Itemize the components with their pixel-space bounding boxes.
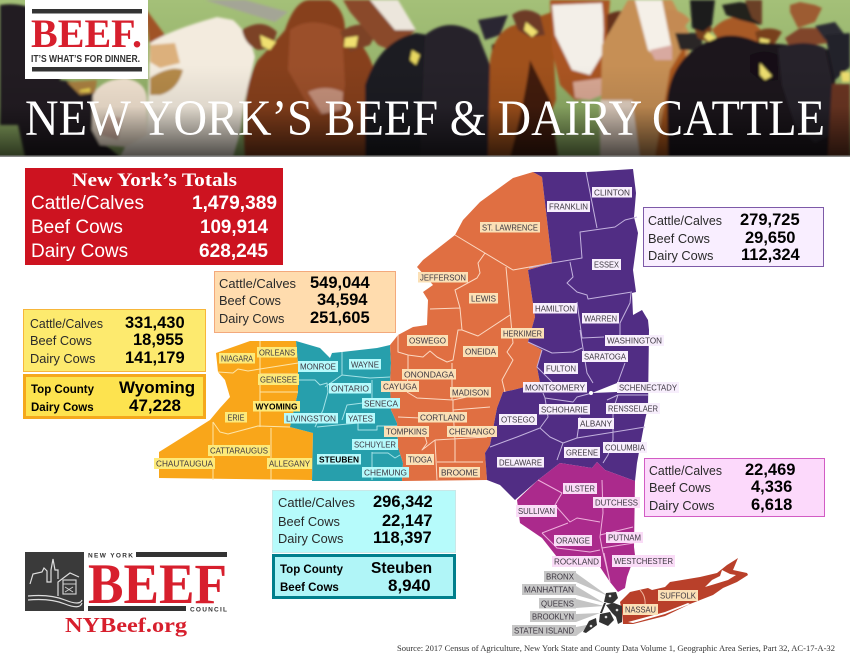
panel: finger lakes region stats: 118,397 <box>373 529 432 547</box>
panel: west region stats <box>24 310 206 372</box>
logo: New York Beef Council: BEEF <box>88 553 227 616</box>
county labels: northeast: RENSSELAER <box>608 404 658 414</box>
county labels: finger lakes: STEUBEN <box>319 454 359 464</box>
county labels: central: OSWEGO <box>409 336 446 346</box>
region: west (orange) <box>159 341 313 480</box>
county labels: central: JEFFERSON <box>420 272 466 282</box>
county labels: northeast: SCHOHARIE <box>541 404 588 414</box>
county labels: New York City: BRONX <box>546 572 574 582</box>
county labels: northeast: FRANKLIN <box>549 202 588 212</box>
panel: New York's totals <box>25 168 283 265</box>
county labels: New York City: STATEN ISLAND <box>514 626 574 636</box>
panel: west region stats: Cattle/Calves <box>30 316 103 331</box>
panel: west region stats: 18,955 <box>133 331 183 349</box>
logo: Beef It's What's For Dinner: IT’S WHAT’S FOR DINNER. <box>31 54 140 65</box>
panel: hudson valley region stats: 4,336 <box>751 478 792 496</box>
panel: central region stats <box>214 272 396 332</box>
website link: NYBeef.org <box>65 613 188 637</box>
source note: Source: 2017 Census of Agriculture, New York State and County Data Volume 1, Geographic Area Series, Part 32, AC-17-A-32 <box>397 643 835 653</box>
county labels: finger lakes: MONROE <box>300 362 336 372</box>
county boundaries <box>213 172 648 606</box>
panel: northeast region stats: Dairy Cows <box>648 248 713 263</box>
county labels: finger lakes: YATES <box>348 414 373 424</box>
county labels: central: ONONDAGA <box>404 370 454 380</box>
logo: New York Beef Council: COUNCIL <box>190 606 227 614</box>
panel: finger lakes region stats: Beef Cows <box>278 514 340 529</box>
panel: finger lakes region stats: Dairy Cows <box>278 531 343 546</box>
panel: top county Steuben: Top County <box>280 564 344 576</box>
county labels: central: TIOGA <box>408 454 432 464</box>
county labels: hudson valley: ROCKLAND <box>554 556 599 566</box>
panel: hudson valley region stats <box>644 458 824 516</box>
county labels: finger lakes: SCHUYLER <box>354 440 396 450</box>
county labels: Long Island: NASSAU <box>625 604 656 614</box>
panel: finger lakes region stats <box>272 490 456 552</box>
panel: hudson valley region stats: Beef Cows <box>649 480 711 495</box>
panel: top county Steuben: Beef Cows <box>280 582 339 594</box>
panel: northeast region stats: Cattle/Calves <box>648 213 722 228</box>
panel: northeast region stats <box>644 208 824 266</box>
county labels: hudson valley: ORANGE <box>556 536 590 546</box>
county labels: New York City: MANHATTAN <box>524 584 574 594</box>
county labels: northeast: HAMILTON <box>535 304 575 314</box>
county labels: Long Island <box>623 590 698 615</box>
region: northeast (purple) <box>485 169 649 500</box>
county labels: central: ST. LAWRENCE <box>482 222 538 232</box>
panel: New York's totals: 1,479,389 <box>192 193 277 214</box>
panel: top county Wyoming: 47,228 <box>129 396 181 415</box>
icon: skyline and barn <box>25 552 84 611</box>
county labels: New York City <box>512 571 576 636</box>
panel: west region stats: Beef Cows <box>30 333 92 348</box>
county labels: west: NIAGARA <box>221 354 253 364</box>
county labels: west: WYOMING <box>256 402 298 412</box>
county labels: northeast: OTSEGO <box>501 414 535 424</box>
county labels: hudson valley: ULSTER <box>565 484 595 494</box>
panel: west region stats: Dairy Cows <box>30 351 95 366</box>
panel: central region stats: 549,044 <box>310 274 370 292</box>
county labels: New York City: QUEENS <box>541 598 574 608</box>
county labels: northeast: WASHINGTON <box>607 336 662 346</box>
county labels: finger lakes: ONTARIO <box>331 384 369 394</box>
county labels: finger lakes <box>284 359 409 478</box>
county labels: northeast: COLUMBIA <box>605 442 645 452</box>
panel: west region stats: 331,430 <box>125 314 185 332</box>
logo: New York Beef Council <box>25 552 227 616</box>
New York City boroughs <box>583 592 622 633</box>
panel: northeast region stats: 112,324 <box>741 246 801 264</box>
logo: Beef It's What's For Dinner <box>25 0 148 79</box>
county labels: northeast: ESSEX <box>594 260 619 270</box>
logo: Beef It's What's For Dinner: BEEF. <box>31 11 142 56</box>
panel: New York's totals: New York’s Totals <box>72 170 237 191</box>
county labels: hudson valley: DUTCHESS <box>595 498 638 508</box>
panel: New York's totals: Dairy Cows <box>31 241 128 262</box>
bays: Long Island white inlets <box>628 570 736 623</box>
county labels: west: CATTARAUGUS <box>210 446 268 456</box>
county labels: northeast: FULTON <box>546 364 576 374</box>
county labels: central: BROOME <box>441 468 478 478</box>
region: hudson valley (magenta) <box>517 462 635 592</box>
county labels: New York City: BROOKLYN <box>532 612 574 622</box>
panel: central region stats: 34,594 <box>317 291 368 309</box>
county labels: northeast: CLINTON <box>594 188 630 198</box>
panel: central region stats: 251,605 <box>310 309 370 327</box>
county labels: central: CAYUGA <box>383 382 417 392</box>
county labels: central: ONEIDA <box>465 346 496 356</box>
county labels: west: GENESEE <box>260 374 297 384</box>
map of New York regions <box>154 169 748 636</box>
logo: New York Beef Council: NEW YORK <box>88 552 133 560</box>
county labels: central <box>381 222 544 478</box>
county labels: west: ALLEGANY <box>269 458 310 468</box>
county labels: northeast: DELAWARE <box>499 458 542 468</box>
county labels: finger lakes: CHEMUNG <box>364 468 407 478</box>
panel: top county Wyoming: Top County <box>31 384 95 396</box>
county labels: finger lakes: WAYNE <box>351 360 379 370</box>
panel: finger lakes region stats: Cattle/Calves <box>278 495 355 510</box>
region: central (burnt orange) <box>390 172 552 481</box>
county labels: northeast: SARATOGA <box>584 352 626 362</box>
panel: top county Wyoming <box>24 376 204 418</box>
county labels: central: CORTLAND <box>420 412 465 422</box>
panel: west region stats: 141,179 <box>125 349 185 367</box>
panel: hudson valley region stats: 22,469 <box>745 461 795 479</box>
county labels: northeast <box>497 187 679 468</box>
county labels: central: MADISON <box>452 388 489 398</box>
county labels: west <box>154 347 312 469</box>
icon: Schenectady pointer <box>589 383 617 395</box>
panel: top county Steuben: 8,940 <box>388 576 431 595</box>
county labels: northeast: ALBANY <box>580 418 612 428</box>
panel: northeast region stats: 29,650 <box>745 229 795 247</box>
county labels: northeast: MONTGOMERY <box>525 382 585 392</box>
region: finger lakes (teal) <box>290 341 403 481</box>
panel: northeast region stats: 279,725 <box>740 211 800 229</box>
panel: New York's totals: 109,914 <box>200 217 268 238</box>
panel: top county Wyoming: Wyoming <box>119 378 195 397</box>
panel: top county Steuben: Steuben <box>371 560 432 577</box>
county labels: west: ORLEANS <box>259 348 295 358</box>
panel: hudson valley region stats: Cattle/Calves <box>649 463 722 478</box>
county labels: Long Island: SUFFOLK <box>660 590 696 600</box>
county labels: hudson valley: SULLIVAN <box>518 506 555 516</box>
county labels: west: CHAUTAUGUA <box>156 458 213 468</box>
county labels: central: TOMPKINS <box>386 426 427 436</box>
panel: central region stats: Dairy Cows <box>219 311 284 326</box>
county labels: hudson valley: WESTCHESTER <box>614 556 673 566</box>
county labels: hudson valley <box>516 483 675 567</box>
county labels: central: LEWIS <box>471 294 496 304</box>
New York City connector wedges <box>576 573 608 636</box>
panel: hudson valley region stats: 6,618 <box>751 496 792 514</box>
panel: New York's totals: 628,245 <box>199 241 268 262</box>
region: Long Island <box>620 558 748 624</box>
county labels: west: ERIE <box>228 412 245 422</box>
panel: northeast region stats: Beef Cows <box>648 231 710 246</box>
panel: New York's totals: Cattle/Calves <box>31 193 144 214</box>
panel: top county Wyoming: Dairy Cows <box>31 402 94 414</box>
panel: New York's totals: Beef Cows <box>31 217 123 238</box>
panel: top county Steuben <box>274 556 454 598</box>
county labels: central: CHENANGO <box>449 426 495 436</box>
panel: finger lakes region stats: 296,342 <box>373 493 433 511</box>
county labels: northeast: SCHENECTADY <box>619 382 677 392</box>
county labels: finger lakes: LIVINGSTON <box>286 414 336 424</box>
panel: central region stats: Cattle/Calves <box>219 276 296 291</box>
county labels: finger lakes: SENECA <box>364 398 398 408</box>
panel: hudson valley region stats: Dairy Cows <box>649 498 714 513</box>
county labels: northeast: GREENE <box>566 448 598 458</box>
county labels: hudson valley: PUTNAM <box>608 532 641 542</box>
panel: finger lakes region stats: 22,147 <box>382 512 432 530</box>
header photo: herd of cattle <box>0 0 850 157</box>
county labels: northeast: WARREN <box>584 314 617 324</box>
panel: central region stats: Beef Cows <box>219 293 281 308</box>
county labels: central: HERKIMER <box>503 328 542 338</box>
